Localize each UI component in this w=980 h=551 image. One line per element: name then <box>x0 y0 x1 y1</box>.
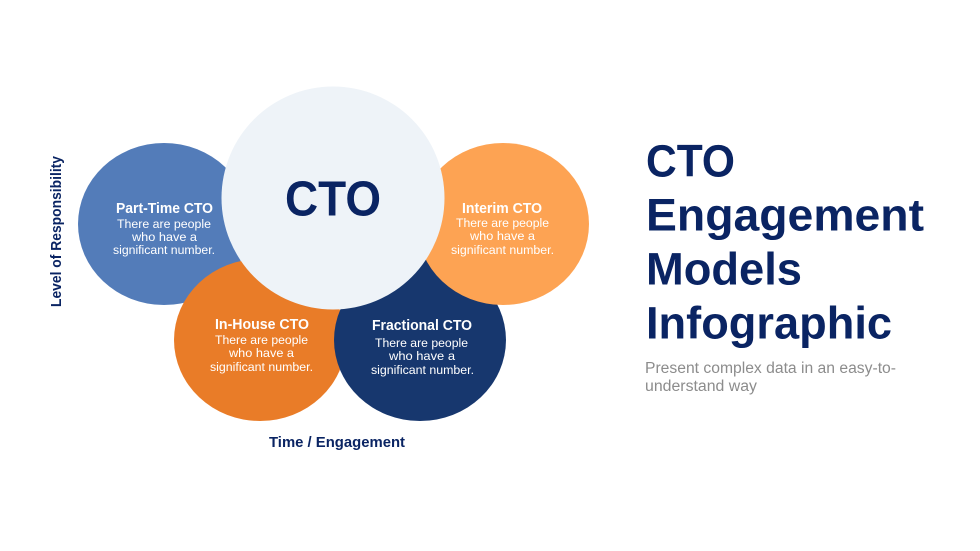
circle: CTO center: CTO <box>285 172 381 226</box>
circle: In-House CTO: In-House CTO <box>215 317 309 333</box>
circle: Interim CTO <box>417 143 589 305</box>
circle: Fractional CTO: There are people <box>375 336 468 350</box>
subtitle <box>645 360 896 395</box>
circle: In-House CTO <box>174 259 346 421</box>
circle: Part-Time CTO: significant number. <box>113 243 215 257</box>
circle: CTO center <box>222 86 444 310</box>
subtitle: Present complex data in an easy-to- <box>645 360 896 377</box>
title <box>646 136 924 348</box>
y axis label: Level of Responsibility <box>49 156 65 307</box>
circle: Interim CTO: who have a <box>469 229 535 243</box>
circle: Fractional CTO: who have a <box>388 349 455 363</box>
circle: Fractional CTO <box>334 259 506 421</box>
circle: Interim CTO: There are people <box>456 216 549 230</box>
x axis label: Time / Engagement <box>269 435 405 451</box>
circle: Part-Time CTO: There are people <box>117 217 211 231</box>
circle: Interim CTO: significant number. <box>451 243 554 257</box>
circle: In-House CTO: significant number. <box>210 360 313 374</box>
circle: Part-Time CTO: Part-Time CTO <box>116 201 213 217</box>
title: CTO <box>646 136 735 186</box>
circle: Fractional CTO: significant number. <box>371 363 474 377</box>
subtitle: understand way <box>645 378 757 395</box>
title: Models <box>646 244 802 294</box>
title: Infographic <box>646 298 892 348</box>
circle: Part-Time CTO <box>78 143 250 305</box>
circle: Part-Time CTO: who have a <box>131 230 197 244</box>
circle: In-House CTO: There are people <box>215 333 308 347</box>
circle: Fractional CTO: Fractional CTO <box>372 318 472 334</box>
circle: Interim CTO: Interim CTO <box>462 201 542 217</box>
circle: In-House CTO: who have a <box>228 346 294 360</box>
title: Engagement <box>646 190 924 240</box>
